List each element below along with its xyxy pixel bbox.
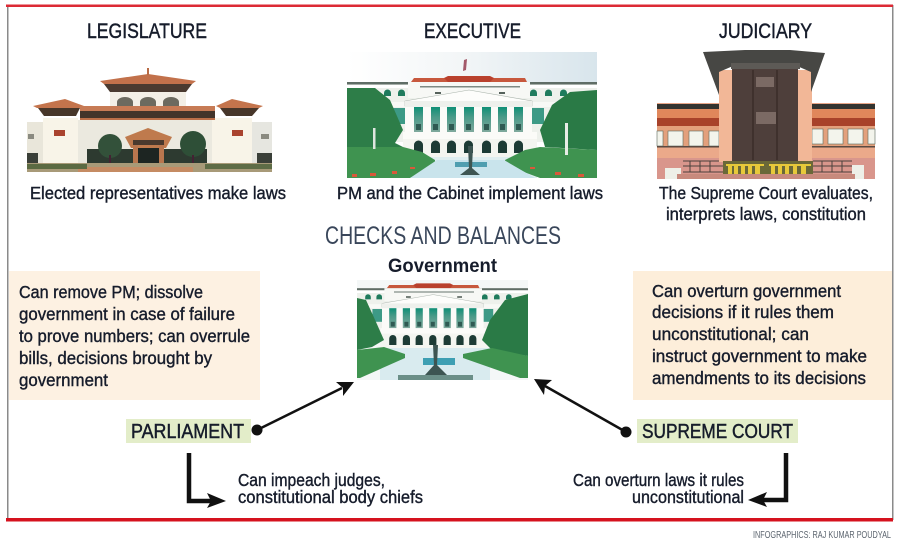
panel: judiciary bbox=[657, 20, 875, 224]
panel: parliament powers: bills, decisions brought by bbox=[19, 348, 212, 368]
panel: parliament powers: to prove numbers; can overrule bbox=[19, 326, 250, 346]
heading: judiciary: JUDICIARY bbox=[719, 20, 812, 43]
panel: supreme court powers: amendments to its decisions bbox=[652, 368, 866, 388]
panel: parliament powers: government in case of failure bbox=[19, 304, 235, 324]
image: supreme court building bbox=[657, 50, 875, 179]
panel: supreme court powers: instruct government to make bbox=[652, 346, 867, 366]
caption: judiciary: The Supreme Court evaluates, bbox=[659, 183, 873, 203]
arrow: supreme court to government bbox=[534, 379, 632, 438]
panel: supreme court powers: unconstitutional; can bbox=[652, 324, 809, 344]
arrow: parliament to government bbox=[252, 382, 354, 436]
text: parliament impeach: constitutional body chiefs bbox=[238, 487, 423, 507]
caption: judiciary: interprets laws, constitution bbox=[666, 204, 866, 224]
caption: judiciary bbox=[659, 183, 873, 224]
caption: legislature: Elected representatives make laws bbox=[30, 183, 286, 203]
text: supreme court overturn: Can overturn laws it rules bbox=[573, 470, 744, 490]
text: parliament impeach bbox=[238, 470, 423, 507]
panel: parliament powers: Can remove PM; dissolve bbox=[19, 282, 203, 302]
image: parliament building bbox=[27, 68, 272, 172]
panel: parliament powers: government bbox=[19, 370, 108, 390]
text: supreme court overturn: unconstitutional bbox=[632, 487, 744, 507]
arrow: parliament to judges bbox=[189, 453, 226, 508]
heading: government: Government bbox=[388, 255, 497, 277]
heading: legislature: LEGISLATURE bbox=[87, 20, 207, 43]
image: government palace bbox=[357, 280, 528, 380]
text: supreme court overturn bbox=[573, 470, 744, 507]
label: supreme court: SUPREME COURT bbox=[642, 421, 793, 443]
panel: supreme court powers bbox=[633, 271, 892, 400]
heading: checks and balances: CHECKS AND BALANCES bbox=[325, 222, 561, 250]
caption: executive: PM and the Cabinet implement laws bbox=[337, 183, 603, 203]
panel: supreme court powers: Can overturn government bbox=[652, 281, 841, 301]
arrow: supreme court to laws bbox=[748, 453, 786, 507]
image: executive palace bbox=[347, 52, 597, 178]
label: parliament: PARLIAMENT bbox=[131, 421, 244, 443]
panel: executive bbox=[337, 20, 603, 203]
panel: parliament powers bbox=[9, 271, 260, 400]
text: parliament impeach: Can impeach judges, bbox=[238, 470, 385, 490]
heading: executive: EXECUTIVE bbox=[424, 20, 521, 43]
panel: legislature bbox=[27, 20, 286, 203]
panel: supreme court powers: decisions if it rules them bbox=[652, 302, 834, 322]
